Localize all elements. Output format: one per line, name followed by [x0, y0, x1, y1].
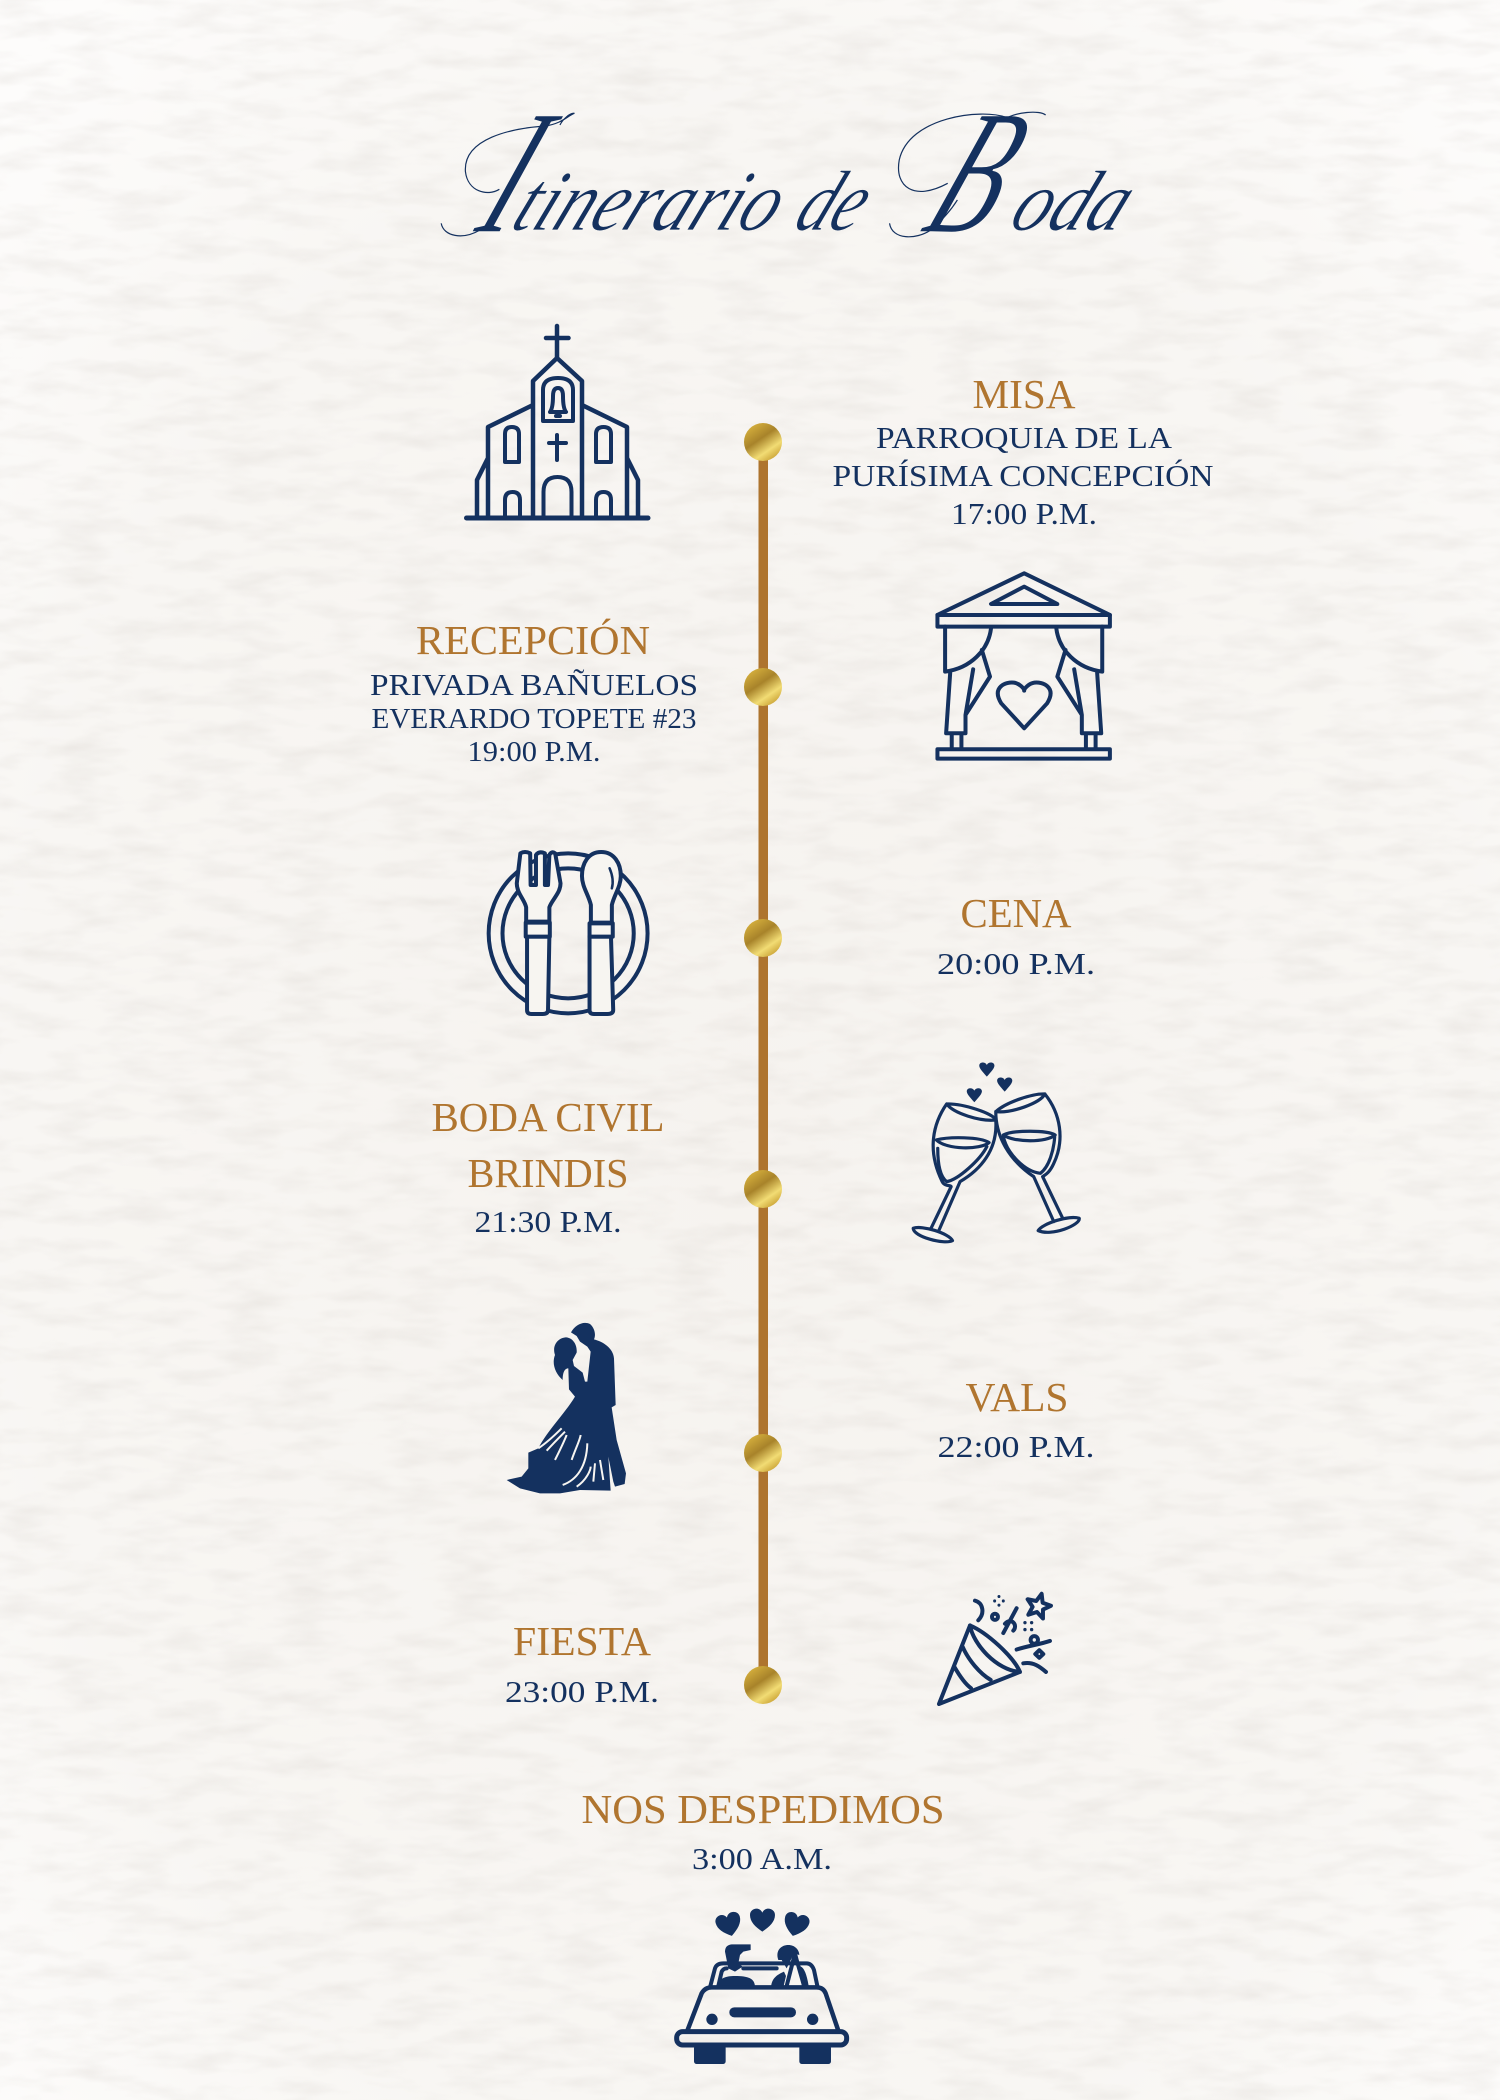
title: oda: [998, 154, 1152, 249]
time: Vals: 22:00 P.M.: [938, 1429, 1094, 1464]
timeline dots: [744, 423, 782, 1704]
title: de: [783, 154, 889, 249]
event: Fiesta: [505, 1618, 659, 1709]
time: Boda civil: 21:30 P.M.: [474, 1204, 622, 1239]
heading: Nos despedimos: NOS DESPEDIMOS: [582, 1786, 944, 1832]
event: Boda civil y brindis: [432, 1094, 664, 1239]
details: Misa: PURÍSIMA CONCEPCIÓN: [832, 458, 1214, 493]
heading: Misa: MISA: [972, 371, 1076, 417]
title: [441, 73, 1152, 271]
event: Nos despedimos: [582, 1786, 944, 1876]
details: Recepción: 19:00 P.M.: [468, 737, 600, 768]
timeline line: [758, 442, 768, 1684]
heading: Brindis: BRINDIS: [468, 1150, 628, 1196]
icon: church: [466, 326, 648, 518]
details: Misa: [832, 420, 1214, 531]
heading: Cena: CENA: [960, 890, 1072, 936]
details: Misa: 17:00 P.M.: [951, 496, 1097, 531]
icon: wedding altar: [937, 573, 1110, 759]
event: Recepción: [370, 617, 698, 768]
details: Misa: PARROQUIA DE LA: [876, 420, 1173, 455]
heading: Boda civil: BODA CIVIL: [432, 1094, 664, 1140]
icon: dancing couple silhouette: [507, 1323, 626, 1493]
details: Recepción: EVERARDO TOPETE #23: [372, 704, 696, 735]
icon: toasting glasses: [913, 1063, 1079, 1242]
icon: getaway car with couple: [677, 1909, 847, 2064]
heading: Recepción: RECEPCIÓN: [416, 617, 650, 663]
details: Recepción: PRIVADA BAÑUELOS: [370, 667, 698, 702]
heading: Fiesta: FIESTA: [513, 1618, 651, 1664]
icon: party popper: [939, 1594, 1051, 1704]
event: Cena: [937, 890, 1095, 981]
time: Nos despedimos: 3:00 A.M.: [692, 1841, 832, 1876]
heading: Vals: VALS: [966, 1374, 1068, 1420]
title: tinerario: [500, 154, 804, 249]
title: B: [901, 75, 1056, 271]
event: Vals: [938, 1374, 1094, 1464]
details: Recepción: [370, 667, 698, 768]
time: Cena: 20:00 P.M.: [937, 946, 1095, 981]
event: Misa: [832, 371, 1214, 531]
icon: plate with fork and spoon: [489, 852, 648, 1014]
title: I: [454, 73, 583, 271]
time: Fiesta: 23:00 P.M.: [505, 1674, 659, 1709]
timeline: [744, 423, 782, 1704]
